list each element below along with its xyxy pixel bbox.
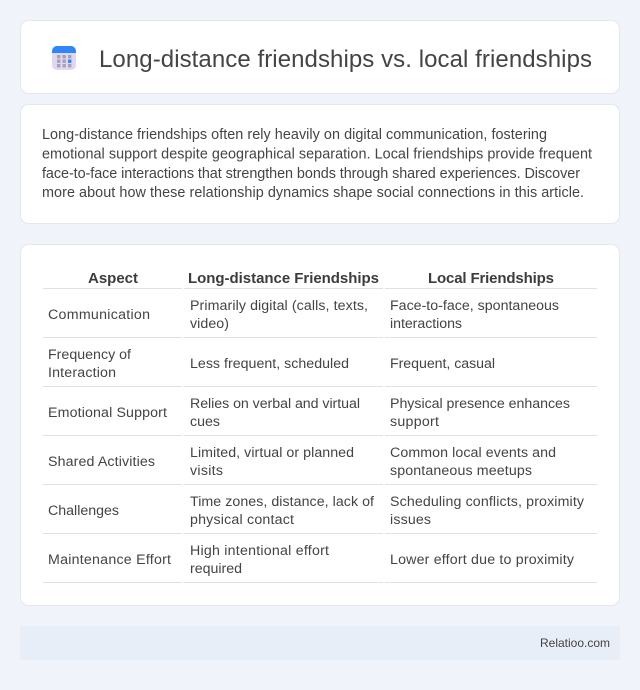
row: challenges bbox=[48, 494, 585, 528]
row: challenges: physical contact bbox=[190, 512, 294, 528]
table header: Aspect bbox=[88, 270, 138, 287]
row: communication: Communication bbox=[48, 307, 150, 323]
row: maintenance effort: Maintenance Effort bbox=[48, 552, 171, 568]
text block: introduction bbox=[42, 127, 592, 201]
row: frequency of interaction: Frequency of bbox=[48, 347, 131, 363]
footer text: Relatioo.com bbox=[540, 636, 610, 650]
row: frequency of interaction: Less frequent, scheduled bbox=[190, 356, 349, 372]
row: maintenance effort bbox=[48, 543, 575, 577]
row: shared activities: visits bbox=[190, 463, 223, 479]
row: shared activities bbox=[48, 445, 556, 479]
row: communication bbox=[48, 298, 559, 332]
title: Long-distance friendships vs. local friendships bbox=[99, 46, 592, 73]
row: communication: Face-to-face, spontaneous bbox=[390, 298, 559, 314]
row: frequency of interaction: Frequent, casual bbox=[390, 356, 495, 372]
text block: introduction: more about how these relationship dynamics shape social connections in this article. bbox=[42, 185, 584, 201]
panel: title card bbox=[20, 20, 620, 94]
table header: Long-distance Friendships bbox=[188, 270, 379, 287]
row: maintenance effort: High intentional effort bbox=[190, 543, 329, 559]
text block: introduction: Long-distance friendships often rely heavily on digital communication, fostering bbox=[42, 127, 547, 143]
text block: introduction: face-to-face interactions that strengthen bonds through shared experiences. Discover bbox=[42, 166, 580, 182]
panel: comparison table bbox=[20, 244, 620, 606]
row: maintenance effort: required bbox=[190, 561, 242, 577]
table header bbox=[88, 270, 554, 287]
row: emotional support bbox=[48, 396, 570, 430]
row: challenges: Scheduling conflicts, proximity bbox=[390, 494, 585, 510]
row: emotional support: cues bbox=[190, 414, 220, 430]
row: shared activities: Shared Activities bbox=[48, 454, 155, 470]
row: challenges: Time zones, distance, lack of bbox=[190, 494, 374, 510]
row: emotional support: Relies on verbal and virtual bbox=[190, 396, 360, 412]
row: emotional support: Emotional Support bbox=[48, 405, 167, 421]
row: communication: Primarily digital (calls, texts, bbox=[190, 298, 368, 314]
row: communication: interactions bbox=[390, 316, 462, 332]
table row rules bbox=[43, 288, 597, 583]
panel: introduction bbox=[20, 104, 620, 224]
row: communication: video) bbox=[190, 316, 229, 332]
table header: Local Friendships bbox=[428, 270, 554, 287]
row: frequency of interaction: Interaction bbox=[48, 365, 116, 381]
text block: introduction: emotional support despite geographical separation. Local friendships provide frequent bbox=[42, 146, 592, 162]
row: emotional support: support bbox=[390, 414, 439, 430]
row: shared activities: Common local events and bbox=[390, 445, 556, 461]
icon: calendar bbox=[52, 46, 76, 70]
row: challenges: Challenges bbox=[48, 503, 119, 519]
row: challenges: issues bbox=[390, 512, 431, 528]
row: emotional support: Physical presence enhances bbox=[390, 396, 570, 412]
row: shared activities: Limited, virtual or planned bbox=[190, 445, 354, 461]
row: shared activities: spontaneous meetups bbox=[390, 463, 532, 479]
row: maintenance effort: Lower effort due to proximity bbox=[390, 552, 575, 568]
footer bar bbox=[20, 626, 620, 660]
row: frequency of interaction bbox=[48, 347, 495, 381]
